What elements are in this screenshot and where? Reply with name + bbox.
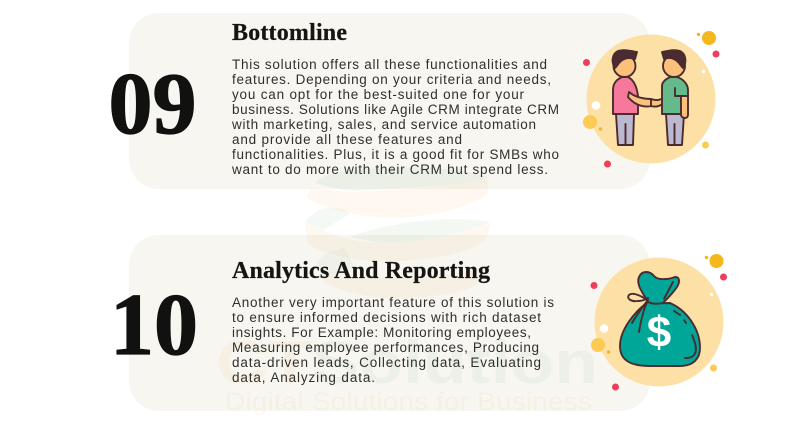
number 10: 10	[110, 277, 198, 374]
text: bottomline body: This solution offers all these functionalities and	[232, 57, 547, 72]
text: bottomline body: business. Solutions like Agile CRM integrate CRM	[232, 102, 559, 117]
text: analytics body: data-driven leads, Collecting data, Evaluating	[232, 355, 541, 370]
text: bottomline body: and provide all these features and	[232, 132, 462, 147]
text: bottomline body: want to do more with their CRM but spend less.	[231, 162, 548, 177]
text: analytics body: Another very important feature of this solution is	[232, 295, 554, 310]
text: analytics body: data, Analyzing data.	[232, 370, 375, 385]
heading: analytics and reporting: Analytics And Reporting	[232, 258, 490, 284]
number 09: 09	[108, 56, 196, 153]
panel: analytics card	[129, 235, 650, 411]
watermark name: CT Solution	[216, 329, 598, 396]
text: analytics body: to ensure informed decisions with rich dataset	[232, 310, 541, 325]
text: bottomline body: features. Depending on your criteria and needs,	[232, 72, 551, 87]
heading: bottomline: Bottomline	[232, 20, 347, 46]
text: bottomline body: with marketing, sales, and service automation	[231, 117, 536, 132]
text: bottomline body: functionalities. Plus, it is a good fit for SMBs who	[232, 147, 559, 162]
watermark tagline: Digital Solutions for Business	[225, 388, 592, 416]
panel: bottomline card	[129, 13, 650, 189]
text: analytics body: insights. For Example: Monitoring employees,	[232, 325, 531, 340]
text: analytics body: Measuring employee performances, Producing	[232, 340, 539, 355]
dollar sign: $	[647, 308, 671, 357]
text: bottomline body: you can opt for the best-suited one for your	[232, 87, 524, 102]
